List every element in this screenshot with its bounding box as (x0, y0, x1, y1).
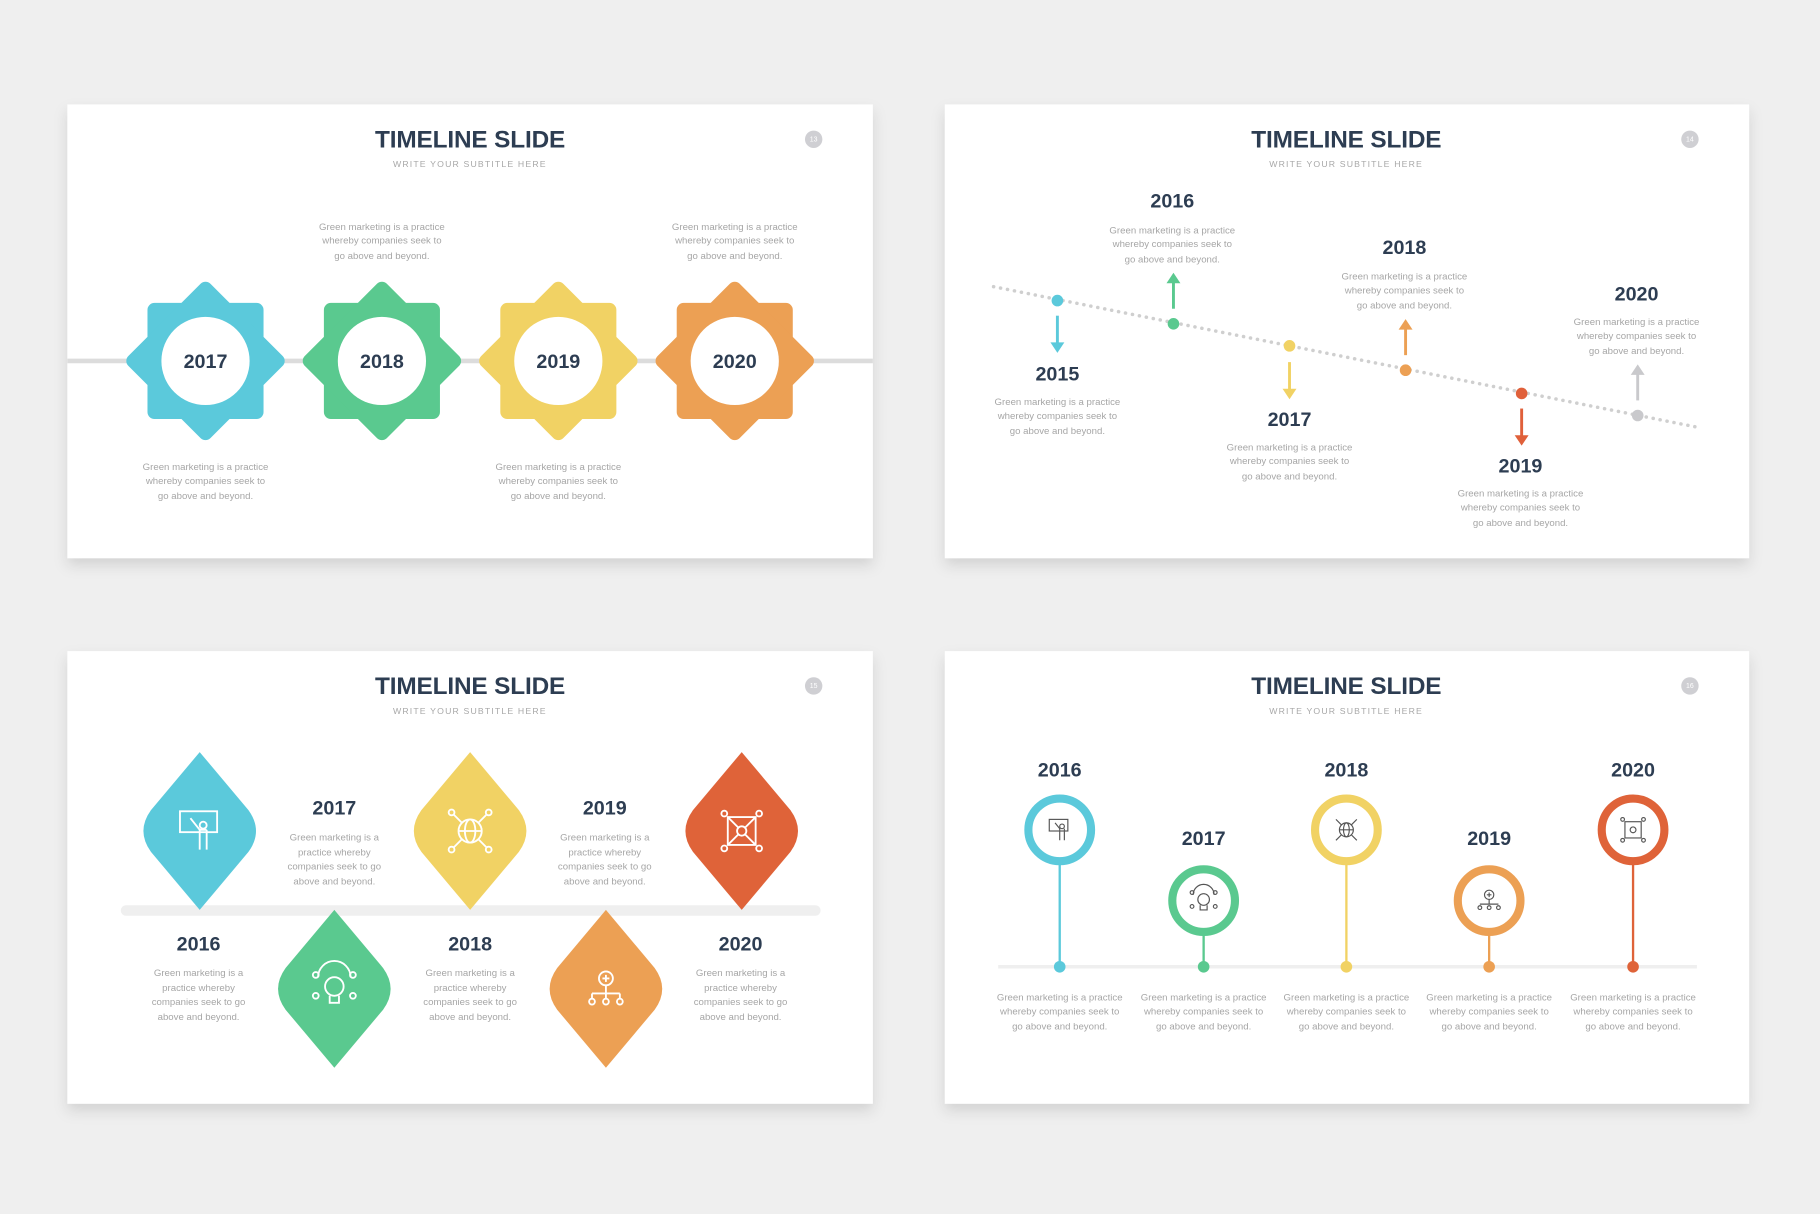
texts slide 4: whereby companies seek to (1572, 1006, 1693, 1017)
subtitle: WRITE YOUR SUBTITLE HERE (1269, 159, 1424, 169)
pin 2018: 2018 (1324, 759, 1368, 781)
text 2019: Green marketing is a practice (495, 462, 621, 473)
star 2017: 2017 (184, 351, 227, 373)
texts slide 4: Green marketing is a practice (1570, 992, 1696, 1003)
diamond 2016 with presenter icon (143, 752, 256, 910)
panel: slide 1 star timeline (67, 104, 873, 558)
label 2020: go above and beyond. (1589, 346, 1684, 357)
label 2019: Green marketing is a (560, 832, 650, 843)
label 2019: practice whereby (568, 847, 641, 858)
text 2019: whereby companies seek to (498, 476, 618, 487)
label 2019 (1458, 455, 1583, 529)
page number: 14 (1686, 137, 1694, 144)
title: TIMELINE SLIDE (375, 673, 565, 700)
label 2015: whereby companies seek to (997, 411, 1117, 422)
panel: slide 2 sloped timeline (945, 104, 1749, 558)
text 2019: go above and beyond. (511, 491, 606, 502)
label 2020: above and beyond. (700, 1012, 781, 1023)
subtitle: WRITE YOUR SUBTITLE HERE (1269, 706, 1424, 716)
texts slide 4: go above and beyond. (1442, 1021, 1537, 1032)
label 2020: practice whereby (704, 983, 777, 994)
label 2016 (152, 934, 245, 1023)
text 2017: Green marketing is a practice (143, 462, 268, 473)
label 2017: 2017 (1268, 409, 1311, 431)
texts slide 4: Green marketing is a practice (1426, 992, 1552, 1003)
star 2018: 2018 (360, 351, 404, 373)
label 2016: Green marketing is a practice (1109, 225, 1235, 236)
text 2020 (672, 222, 798, 262)
pin 2016: 2016 (1038, 759, 1082, 781)
text 2018: whereby companies seek to (321, 236, 442, 247)
texts slide 4: whereby companies seek to (1428, 1006, 1549, 1017)
text 2020: whereby companies seek to (674, 236, 794, 247)
label 2016: Green marketing is a (154, 968, 244, 979)
text 2020: go above and beyond. (687, 251, 782, 262)
label 2016: practice whereby (162, 983, 235, 994)
label 2016: go above and beyond. (1125, 254, 1220, 265)
diamond 2019 with network icon (550, 910, 662, 1068)
label 2020: Green marketing is a practice (1574, 317, 1699, 328)
label 2017: above and beyond. (293, 876, 375, 887)
label 2017: go above and beyond. (1242, 471, 1337, 482)
label 2020: companies seek to go (694, 997, 787, 1008)
pin 2019 (1458, 828, 1520, 973)
label 2017: whereby companies seek to (1229, 456, 1349, 467)
label 2019: go above and beyond. (1473, 518, 1568, 529)
star 2020 (653, 279, 817, 443)
label 2016: above and beyond. (158, 1012, 239, 1023)
star 2018 (300, 279, 464, 443)
pin 2016 (1028, 759, 1091, 973)
dot+arrow 2017 (1283, 340, 1296, 399)
title: TIMELINE SLIDE (1251, 673, 1442, 700)
subtitle: WRITE YOUR SUBTITLE HERE (393, 159, 547, 169)
star 2020: 2020 (713, 351, 757, 373)
texts slide 4: go above and beyond. (1585, 1021, 1681, 1032)
label 2019: companies seek to go (558, 861, 652, 872)
label 2017: Green marketing is a practice (1227, 442, 1352, 453)
label 2019: 2019 (583, 798, 627, 820)
label 2018: Green marketing is a practice (1342, 272, 1467, 283)
label 2017: 2017 (312, 798, 356, 820)
label 2017 (288, 798, 381, 887)
title: TIMELINE SLIDE (375, 126, 565, 153)
pin 2020 (1602, 759, 1664, 973)
label 2015 (995, 364, 1120, 437)
texts slide 4: Green marketing is a practice (997, 992, 1123, 1003)
label 2018 (1342, 237, 1467, 312)
label 2017: Green marketing is a (290, 832, 380, 843)
star 2019: 2019 (536, 351, 580, 373)
texts slide 4: go above and beyond. (1299, 1021, 1394, 1032)
text 2017: whereby companies seek to (145, 476, 265, 487)
label 2020: Green marketing is a (696, 968, 786, 979)
page number: 15 (810, 683, 818, 690)
label 2016 (1109, 191, 1235, 265)
texts slide 4: whereby companies seek to (1143, 1006, 1263, 1017)
label 2018: Green marketing is a (425, 968, 515, 979)
star 2017 (123, 279, 288, 443)
label 2018: 2018 (1382, 237, 1426, 259)
text 2017: go above and beyond. (158, 491, 253, 502)
page number (1681, 677, 1699, 695)
diamond 2020 with team icon (685, 752, 798, 910)
page number: 13 (810, 137, 818, 144)
label 2018 (423, 934, 517, 1023)
text 2019 (495, 462, 621, 502)
subtitle: WRITE YOUR SUBTITLE HERE (393, 706, 547, 716)
label 2019: 2019 (1499, 455, 1542, 477)
label 2017: practice whereby (298, 847, 371, 858)
text 2017 (143, 462, 268, 502)
label 2015: 2015 (1035, 364, 1079, 386)
label 2019 (558, 798, 652, 887)
texts slide 4: Green marketing is a practice (1141, 992, 1266, 1003)
texts slide 4: go above and beyond. (1156, 1021, 1251, 1032)
label 2020 (694, 934, 787, 1023)
page number (805, 131, 822, 148)
dot+arrow 2016 (1166, 273, 1180, 330)
dot+arrow 2020 (1631, 364, 1645, 421)
label 2015: Green marketing is a practice (995, 397, 1120, 408)
diamond 2018 with globe icon (414, 752, 526, 910)
panel: slide 3 diamond timeline (67, 651, 873, 1104)
label 2016: whereby companies seek to (1112, 239, 1232, 250)
page number: 16 (1686, 683, 1694, 690)
page number (805, 677, 822, 695)
dot+arrow 2018 (1399, 319, 1413, 376)
title: TIMELINE SLIDE (1251, 126, 1442, 153)
label 2017: companies seek to go (288, 861, 381, 872)
texts slide 4: Green marketing is a practice (1284, 992, 1409, 1003)
pin 2017: 2017 (1182, 828, 1226, 850)
panel: slide 4 pin timeline (945, 651, 1749, 1104)
label 2016: 2016 (177, 934, 221, 956)
label 2016: companies seek to go (152, 997, 245, 1008)
label 2020: 2020 (1615, 284, 1659, 306)
texts slide 4: go above and beyond. (1012, 1021, 1107, 1032)
text 2020: Green marketing is a practice (672, 222, 798, 233)
pin 2020: 2020 (1611, 759, 1655, 781)
text 2018: go above and beyond. (334, 251, 430, 262)
label 2019: whereby companies seek to (1460, 503, 1580, 514)
label 2018: practice whereby (434, 983, 507, 994)
label 2020: whereby companies seek to (1576, 331, 1696, 342)
label 2016: 2016 (1150, 191, 1194, 213)
pin 2019: 2019 (1467, 828, 1511, 850)
label 2018: go above and beyond. (1357, 301, 1452, 312)
texts slide 4: whereby companies seek to (999, 1006, 1119, 1017)
diamond 2017 with idea icon (278, 910, 391, 1068)
label 2017 (1227, 409, 1352, 482)
pin 2017 (1172, 828, 1235, 973)
star 2019 (476, 279, 640, 443)
label 2020: 2020 (719, 934, 763, 956)
dot+arrow 2015 (1050, 295, 1064, 353)
page number (1681, 131, 1699, 148)
texts slide 4 (997, 992, 1696, 1032)
label 2015: go above and beyond. (1010, 426, 1105, 437)
texts slide 4: whereby companies seek to (1286, 1006, 1406, 1017)
label 2018: 2018 (448, 934, 492, 956)
text 2018 (319, 222, 445, 262)
label 2019: above and beyond. (564, 876, 646, 887)
pin 2018 (1315, 759, 1378, 973)
dot+arrow 2019 (1515, 388, 1529, 446)
label 2019: Green marketing is a practice (1458, 489, 1583, 500)
label 2018: companies seek to go (423, 997, 517, 1008)
label 2018: whereby companies seek to (1344, 286, 1464, 297)
label 2018: above and beyond. (429, 1012, 511, 1023)
text 2018: Green marketing is a practice (319, 222, 445, 233)
label 2020 (1574, 284, 1699, 357)
